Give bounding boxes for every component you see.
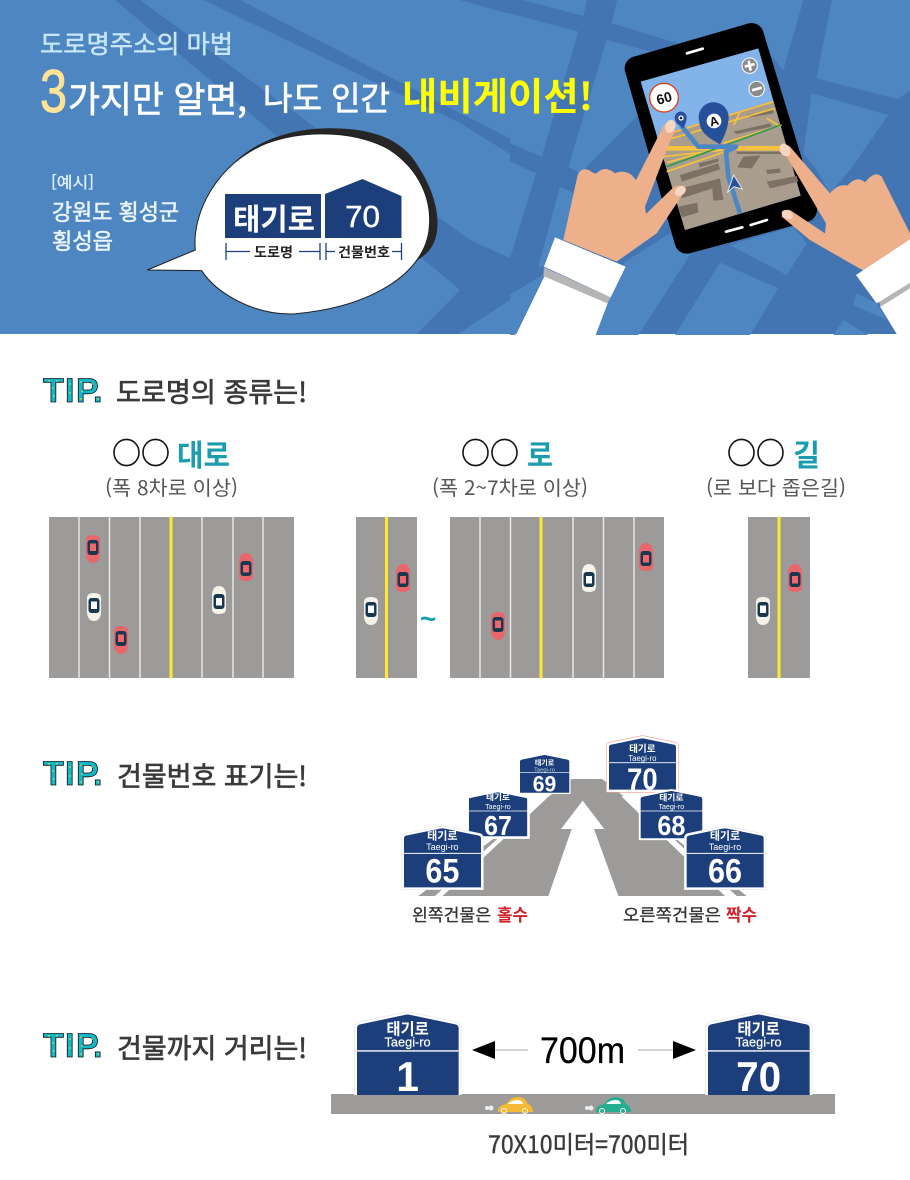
sign: building 70: 태기로 (737, 1016, 780, 1040)
sign: building 1: Taegi-ro (385, 1034, 431, 1049)
header background panel (0, 0, 910, 335)
tablet screen map (641, 48, 801, 230)
section heading: distance: 건물까지 거리는! (117, 1027, 307, 1066)
sign 68: 68 (657, 810, 685, 841)
icon: right cuff and sleeve (856, 238, 910, 337)
column: road heading: 로 (527, 431, 553, 475)
speech bubble with address sign: 태기로 (233, 195, 315, 239)
column: street heading: ○○ (727, 429, 785, 473)
sign 66: 태기로 (710, 827, 740, 843)
column: road heading (432, 429, 588, 501)
caption: left buildings odd (412, 901, 528, 926)
arrow: right (638, 1041, 696, 1059)
speech bubble with address sign: 70 (345, 199, 380, 234)
caption: right buildings even: 짝수 (726, 901, 757, 926)
distance label with arrows: 700m (540, 1030, 625, 1071)
sign 68: Taegi-ro (658, 802, 684, 811)
icon: zoom out (749, 81, 764, 97)
perspective road (418, 779, 747, 896)
caption: left buildings odd: 홀수 (497, 901, 528, 926)
icon: small pin (675, 112, 687, 128)
tip badge: TIP. (43, 372, 102, 410)
column: boulevard heading: ○○ (112, 429, 170, 473)
tilde between road diagrams: ~ (420, 603, 436, 634)
caption: right buildings even: 오른쪽건물은 (623, 901, 721, 926)
icon: location pin A: A (708, 114, 720, 130)
section heading: building numbers: 건물번호 표기는! (117, 755, 307, 794)
sign 67: 태기로 (486, 791, 510, 803)
sign 70 (609, 738, 676, 796)
road name plate (225, 194, 321, 238)
sign 70: 태기로 (629, 741, 656, 755)
icon: speed limit 60 (650, 83, 678, 112)
icon: green car (585, 1097, 631, 1114)
headline number 3: 3 (40, 58, 67, 125)
column: boulevard heading (105, 429, 238, 501)
sign 65: Taegi-ro (426, 842, 459, 852)
sign: building 1: 태기로 (386, 1016, 429, 1040)
tip badge: TIP. (43, 1027, 102, 1065)
sign 67 (468, 791, 528, 841)
example address text: [예시] (51, 169, 94, 193)
sign 66 (687, 827, 764, 891)
sign 70: 70 (627, 763, 658, 796)
column: road heading: ○○ (461, 429, 519, 473)
speech bubble with address sign: 건물번호 (338, 241, 390, 261)
road diagram: 7 lanes (450, 517, 664, 678)
column: street heading (706, 429, 846, 501)
column: road heading: (폭 2~7차로 이상) (432, 472, 588, 501)
sign 65 (404, 827, 481, 891)
sign: building 1 (353, 1014, 463, 1101)
caption: left buildings odd: 왼쪽건물은 (412, 901, 491, 926)
column: street heading: (로 보다 좁은길) (706, 472, 846, 501)
sign 65: 태기로 (427, 827, 457, 843)
sign 70: Taegi-ro (628, 754, 657, 763)
road diagram: 8 lanes (49, 517, 294, 678)
dimension brackets (226, 243, 402, 260)
icon: navigation arrow (727, 175, 742, 193)
column: boulevard heading: 대로 (177, 431, 230, 475)
sign 69 (520, 755, 569, 797)
tip badge: TIP. (43, 755, 102, 793)
section heading: road name types: 도로명의 종류는! (116, 371, 307, 410)
speech bubble with address sign: 도로명 (254, 241, 293, 261)
column: street heading: 길 (793, 431, 820, 475)
sign 67: Taegi-ro (485, 803, 511, 811)
headline yellow: 내비게이션! (402, 66, 593, 121)
sign: building 70: 70 (736, 1053, 781, 1100)
icon: yellow car (485, 1097, 533, 1114)
sign 66: 66 (708, 853, 742, 891)
building number road diagram (404, 738, 764, 896)
headline white second part: 나도 인간 (263, 72, 390, 120)
sign 68: 태기로 (659, 790, 683, 803)
subtitle: 도로명주소의 마법 (40, 25, 233, 61)
sign 69: Taegi-ro (534, 767, 555, 773)
speech bubble with address sign (147, 128, 438, 314)
column: boulevard heading: (폭 8차로 이상) (105, 472, 238, 501)
icon: location pin A (699, 102, 729, 144)
icon: left cuff and sleeve (515, 237, 626, 337)
arrow: left (472, 1041, 528, 1059)
road diagram: 2 lanes (356, 517, 417, 678)
icon: zoom in (742, 58, 757, 73)
headline white: 가지만 알면, (68, 71, 247, 123)
sign 65: 65 (425, 853, 459, 891)
route line (681, 125, 740, 213)
example address text (51, 169, 179, 256)
title (40, 25, 593, 125)
navigation tablet with hands (515, 35, 910, 337)
sign: building 70 (704, 1014, 814, 1101)
road diagram: narrow street (748, 517, 810, 678)
sign 69: 태기로 (535, 758, 555, 768)
icon: tablet body (637, 35, 805, 242)
sign 66: Taegi-ro (709, 842, 741, 852)
building number plate (325, 179, 402, 238)
distance label with arrows (472, 1030, 696, 1071)
sign 68 (641, 790, 702, 841)
distance diagram road (331, 1094, 835, 1114)
distance formula: 70X10미터=700미터 (488, 1125, 689, 1160)
example address text: 강원도 횡성군 (52, 195, 179, 227)
sign 67: 67 (484, 810, 512, 841)
sign: building 1: 1 (396, 1053, 419, 1100)
tablet buttons (687, 49, 767, 232)
icon: speed limit 60: 60 (654, 88, 674, 108)
sign: building 70: Taegi-ro (736, 1034, 782, 1049)
example address text: 횡성읍 (52, 224, 113, 256)
sign 69: 69 (533, 772, 556, 797)
icon: left hand (563, 118, 688, 262)
icon: right hand (777, 142, 910, 271)
